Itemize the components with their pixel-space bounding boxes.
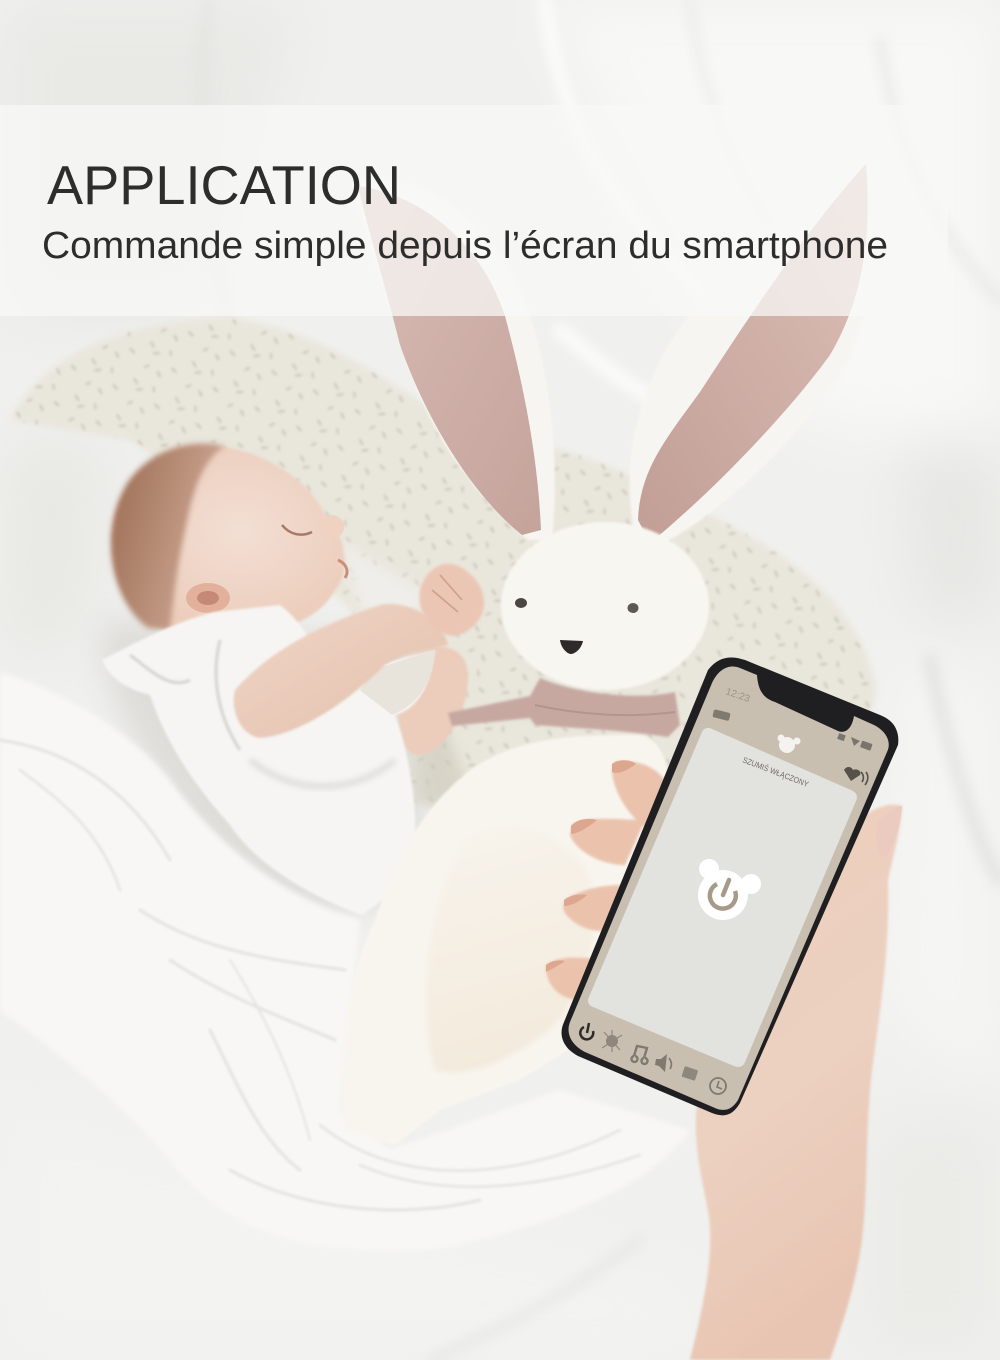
dress	[102, 605, 435, 915]
phone screen	[569, 667, 889, 1110]
phone body	[562, 657, 898, 1115]
battery	[712, 709, 731, 721]
rabbit head	[501, 522, 709, 690]
bottom navigation icons	[580, 1023, 726, 1094]
small bear logo	[778, 734, 800, 753]
power bear icon	[698, 859, 761, 920]
rabbit ears	[352, 158, 874, 548]
status time: 12:23	[724, 686, 752, 705]
palm and wrist	[690, 805, 902, 1360]
card	[588, 728, 857, 1067]
baby shadow	[102, 620, 423, 911]
baby far arm	[399, 647, 468, 755]
rabbit body	[343, 522, 709, 1145]
smartphone	[562, 657, 898, 1115]
title: APPLICATION	[47, 154, 401, 216]
subtitle: Commande simple depuis l’écran du smartphone	[42, 225, 888, 267]
head	[111, 444, 347, 634]
muslin blanket	[0, 672, 690, 1251]
pillow with leaf print	[10, 318, 876, 830]
baby arm and hand	[234, 604, 448, 738]
fingers	[546, 761, 668, 1000]
screen title: SZUMIŚ WŁĄCZONY	[741, 755, 810, 789]
heart sound icon	[844, 767, 860, 781]
baby	[102, 444, 484, 915]
plush body blanket	[343, 735, 670, 1145]
status icons	[837, 733, 873, 751]
thumb nail	[876, 806, 902, 858]
nose	[560, 640, 583, 654]
icon: left ear	[352, 179, 555, 540]
icon: right ear	[629, 158, 874, 548]
eyes	[515, 598, 527, 608]
hand holding phone	[546, 760, 902, 1360]
scarf	[448, 678, 680, 737]
panel: translucent title band	[0, 105, 948, 316]
